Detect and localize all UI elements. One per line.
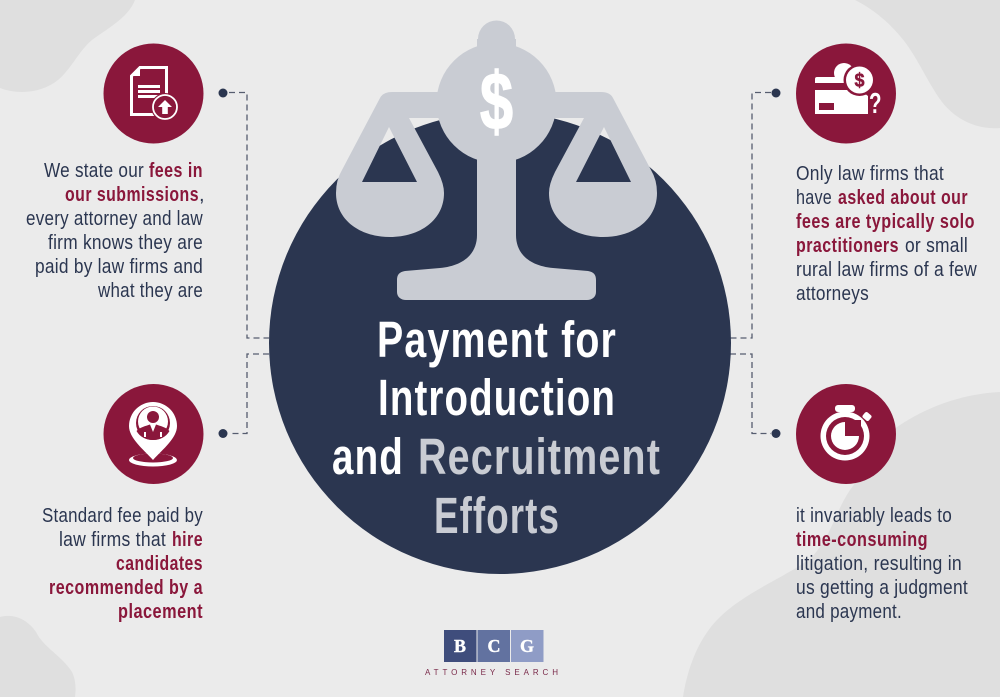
text block: rural law firms of a few: [796, 259, 977, 281]
icon: card, coin and question mark: $: [854, 70, 865, 92]
text block: fees in: [149, 160, 203, 182]
connector dots: [218, 88, 780, 438]
text block: candidates: [116, 553, 203, 575]
text block: asked about our: [838, 187, 968, 209]
text block: recommended by a: [49, 577, 203, 599]
logo: BCG Attorney Search: [425, 630, 558, 677]
text block: us getting a judgment: [796, 577, 968, 599]
central navy circle: [269, 112, 731, 574]
text block: practitioners: [796, 235, 899, 257]
text block: [26, 160, 205, 302]
logo: BCG Attorney Search: C: [488, 636, 500, 656]
text block: [796, 163, 977, 305]
icon: location pin with person: [104, 384, 204, 484]
text block: Standard fee paid by: [42, 505, 203, 527]
panel: fees in submissions: [26, 44, 205, 302]
text block: and payment.: [796, 601, 902, 623]
logo: BCG Attorney Search: G: [520, 636, 534, 656]
text block: hire: [172, 529, 203, 551]
text block: ,: [199, 184, 205, 206]
connector lines: [229, 92, 771, 434]
text block: law firms that: [59, 529, 166, 551]
title: Efforts: [434, 487, 560, 544]
title: Recruitment: [418, 428, 661, 485]
text block: [42, 505, 203, 623]
text block: have: [796, 187, 832, 209]
text block: attorneys: [796, 283, 869, 305]
title: [332, 311, 661, 544]
text block: it invariably leads to: [796, 505, 952, 527]
title: Payment for: [377, 311, 617, 368]
text block: or small: [905, 235, 968, 257]
icon: stopwatch: [796, 384, 896, 484]
text block: placement: [118, 601, 203, 623]
text block: We state our: [44, 160, 144, 182]
title: and: [332, 428, 404, 485]
icon: card, coin and question mark: [796, 44, 896, 144]
panel: standard fee: [42, 384, 204, 623]
dollar sign: $: [480, 57, 513, 147]
panel: asked about fees: [796, 44, 977, 305]
panel: time-consuming litigation: [796, 384, 968, 623]
icon: balance scale with dollar sign: [336, 20, 657, 300]
icon: document upload: [104, 44, 204, 144]
text block: [796, 505, 968, 623]
icon: card, coin and question mark: ?: [869, 88, 882, 120]
text block: paid by law firms and: [35, 256, 203, 278]
text block: time-consuming: [796, 529, 928, 551]
text block: what they are: [97, 280, 203, 302]
text block: firm knows they are: [48, 232, 203, 254]
title: Introduction: [378, 369, 616, 426]
text block: every attorney and law: [26, 208, 203, 230]
text block: Only law firms that: [796, 163, 944, 185]
text block: litigation, resulting in: [796, 553, 962, 575]
logo: BCG Attorney Search: B: [454, 636, 466, 656]
text block: our submissions: [65, 184, 199, 206]
logo: BCG Attorney Search: ATTORNEY SEARCH: [425, 668, 558, 677]
